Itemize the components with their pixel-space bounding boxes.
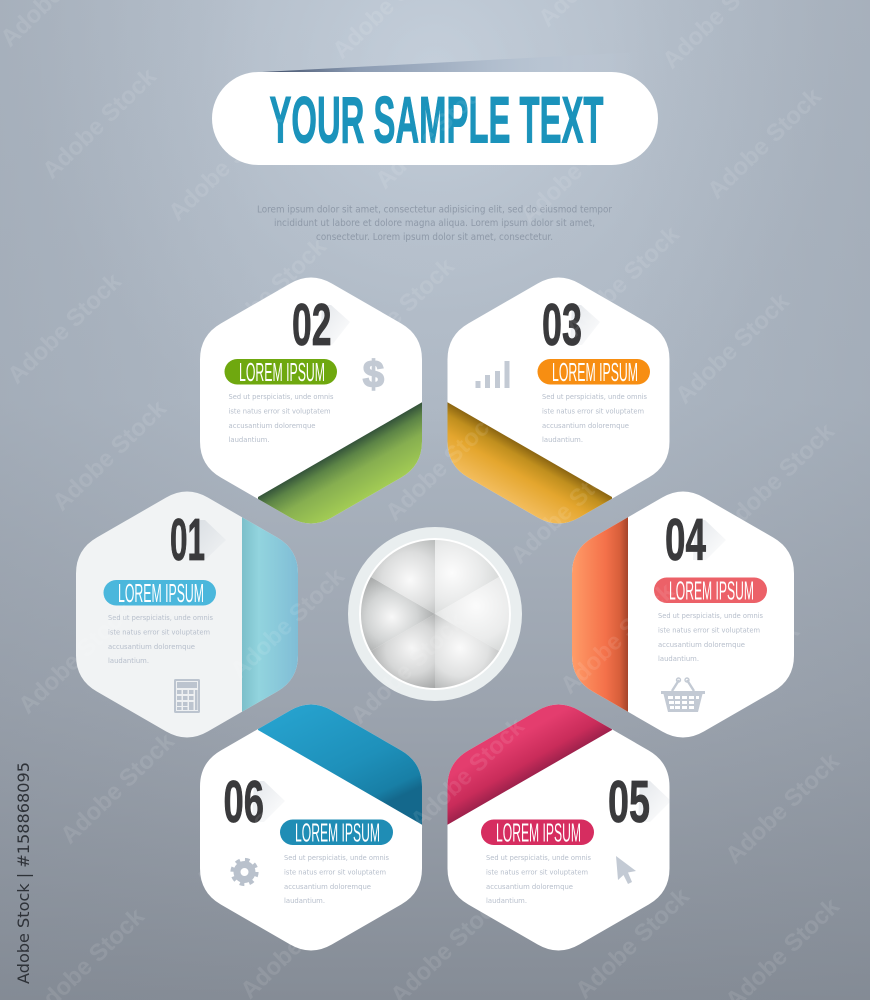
watermark: Adobe Stock bbox=[37, 63, 162, 184]
text 06 bbox=[284, 853, 389, 905]
text 01 bbox=[108, 613, 213, 665]
number 01: 01 bbox=[170, 507, 205, 573]
icon: basket bbox=[661, 678, 705, 712]
pill 04: LOREM IPSUM bbox=[669, 576, 754, 606]
panel 02 bbox=[200, 278, 426, 536]
watermark: Adobe Stock bbox=[670, 288, 795, 409]
pill 03 bbox=[538, 357, 650, 387]
watermark: Adobe Stock bbox=[405, 713, 530, 834]
watermark: Adobe Stock bbox=[380, 405, 505, 526]
watermark: Adobe Stock bbox=[13, 598, 138, 719]
watermark: Adobe Stock bbox=[515, 108, 640, 229]
text 05: laudantium. bbox=[486, 896, 527, 905]
number 06: 06 bbox=[224, 769, 264, 835]
panel 06 bbox=[200, 692, 426, 950]
watermark: Adobe Stock bbox=[225, 563, 350, 684]
watermark: Adobe Stock bbox=[55, 728, 180, 849]
text 04: iste natus error sit voluptatem bbox=[658, 626, 760, 634]
watermark: Adobe Stock bbox=[370, 73, 495, 194]
watermark: Adobe Stock bbox=[190, 773, 315, 894]
pill 01: LOREM IPSUM bbox=[118, 578, 204, 608]
pill 05 bbox=[481, 818, 594, 848]
panel 01 bbox=[76, 484, 302, 744]
text 03: accusantium doloremque bbox=[542, 421, 629, 430]
number 04: 04 bbox=[665, 507, 706, 573]
watermark: Adobe Stock bbox=[720, 748, 845, 869]
center circle bbox=[348, 527, 522, 701]
text 02: accusantium doloremque bbox=[228, 421, 316, 430]
number 02: 02 bbox=[292, 292, 332, 358]
text 03: iste natus error sit voluptatem bbox=[542, 406, 644, 416]
watermark: Adobe Stock bbox=[715, 418, 840, 539]
watermark: Adobe Stock bbox=[345, 608, 470, 729]
text 01: accusantium doloremque bbox=[108, 642, 195, 651]
text 05: accusantium doloremque bbox=[486, 882, 573, 891]
intro paragraph: Lorem ipsum dolor sit amet, consectetur adipisicing elit, sed do eiusmod tempor bbox=[257, 204, 612, 216]
icon: signal bars bbox=[476, 361, 510, 388]
pill 01 bbox=[104, 578, 216, 608]
sectors bbox=[361, 540, 509, 688]
number 03: 03 bbox=[542, 292, 582, 358]
stock id: Adobe Stock | #158868095 bbox=[14, 762, 33, 984]
panel 04 bbox=[568, 484, 794, 744]
text 04 bbox=[658, 611, 763, 663]
text 06: laudantium. bbox=[284, 896, 325, 905]
text 04: laudantium. bbox=[658, 654, 699, 663]
watermark: Adobe Stock bbox=[335, 253, 460, 374]
title shadow wedge bbox=[262, 52, 640, 72]
watermark: Adobe Stock bbox=[702, 83, 827, 204]
pill 02: LOREM IPSUM bbox=[239, 357, 325, 387]
pill 05: LOREM IPSUM bbox=[496, 818, 581, 848]
text 05: Sed ut perspiciatis, unde omnis bbox=[486, 853, 591, 862]
intro paragraph bbox=[257, 204, 612, 243]
pill 03: LOREM IPSUM bbox=[552, 357, 638, 387]
text 06: Sed ut perspiciatis, unde omnis bbox=[284, 853, 389, 862]
pill 02 bbox=[224, 357, 337, 387]
text 06: iste natus error sit voluptatem bbox=[284, 868, 386, 876]
text 02: Sed ut perspiciatis, unde omnis bbox=[228, 392, 334, 401]
text 05 bbox=[486, 853, 591, 905]
text 02 bbox=[228, 392, 334, 444]
text 03 bbox=[542, 392, 647, 444]
watermark: Adobe Stock bbox=[2, 268, 127, 389]
watermark: Adobe Stock bbox=[163, 105, 288, 226]
title pill bbox=[212, 72, 658, 165]
pill 06: LOREM IPSUM bbox=[295, 818, 380, 848]
icon: calculator bbox=[174, 679, 200, 713]
watermark: Adobe Stock bbox=[680, 618, 805, 739]
watermark: Adobe Stock bbox=[555, 578, 680, 699]
text 01: laudantium. bbox=[108, 656, 149, 665]
text 02: iste natus error sit voluptatem bbox=[228, 406, 330, 416]
watermark: Adobe Stock bbox=[207, 233, 332, 354]
intro paragraph: incididunt ut labore et dolore magna aliqua. Lorem ipsum dolor sit amet, bbox=[274, 218, 595, 229]
panel 03 bbox=[444, 278, 670, 536]
intro paragraph: consectetur. Lorem ipsum dolor sit amet, consectetur. bbox=[316, 232, 553, 243]
icon: gear bbox=[232, 860, 257, 884]
number 05: 05 bbox=[608, 769, 650, 835]
icon: dollar: $ bbox=[363, 354, 384, 396]
pill 06 bbox=[280, 818, 393, 848]
text 06: accusantium doloremque bbox=[284, 882, 371, 891]
pill 04 bbox=[654, 576, 767, 606]
text 01: Sed ut perspiciatis, unde omnis bbox=[108, 613, 213, 622]
panel 05 bbox=[444, 692, 671, 950]
text 02: laudantium. bbox=[228, 435, 270, 444]
text 04: Sed ut perspiciatis, unde omnis bbox=[658, 611, 763, 620]
watermark: Adobe Stock bbox=[47, 395, 172, 516]
text 05: iste natus error sit voluptatem bbox=[486, 868, 588, 876]
text 01: iste natus error sit voluptatem bbox=[108, 628, 210, 636]
text 04: accusantium doloremque bbox=[658, 640, 745, 649]
watermark: Adobe Stock bbox=[505, 448, 630, 569]
icon: cursor bbox=[616, 856, 636, 884]
text 03: laudantium. bbox=[542, 435, 583, 444]
text 03: Sed ut perspiciatis, unde omnis bbox=[542, 392, 647, 401]
watermark: Adobe Stock bbox=[560, 221, 685, 342]
